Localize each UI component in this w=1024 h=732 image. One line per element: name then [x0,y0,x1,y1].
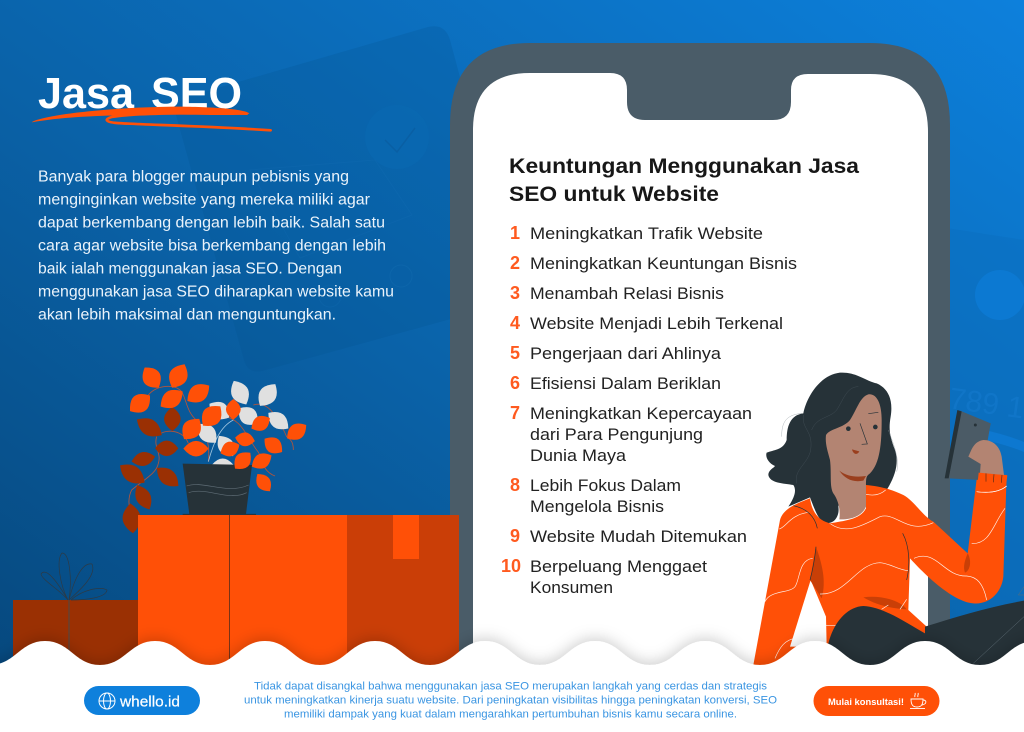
item 6: 6 [510,373,520,393]
item 4: 4 [510,313,520,333]
item 3: Menambah Relasi Bisnis [530,284,724,303]
item 2: Meningkatkan Keuntungan Bisnis [530,254,797,273]
phone heading: Keuntungan Menggunakan Jasa [509,154,860,178]
title: Jasa SEO [32,69,271,130]
item 5: 5 [510,343,520,363]
item 8: 8 [510,475,520,495]
item 7: dari Para Pengunjung [530,425,703,444]
neck and face [826,394,882,519]
intro paragraph: menginginkan website yang mereka miliki agar [38,192,370,208]
intro paragraph: Banyak para blogger maupun pebisnis yang [38,168,349,186]
plant [115,360,311,534]
title: Jasa SEO: Jasa [38,69,135,118]
item 10: 10 [501,556,521,576]
small gift box [13,553,138,670]
plant vines [129,386,293,510]
item 3: 3 [510,283,520,303]
item 8 [510,475,681,516]
shoulder creases [793,506,909,580]
hair [766,373,897,523]
item 10 [501,556,707,597]
call-to-action button: Mulai konsultasi! [828,697,904,708]
cuff edge [977,486,1007,492]
footer text [244,680,777,720]
item 6: Efisiensi Dalam Beriklan [530,374,721,393]
cuff [977,473,1007,492]
item 7: Meningkatkan Kepercayaan [530,404,752,423]
intro paragraph [38,168,394,324]
title: Jasa SEO: SEO [151,69,242,118]
item 7 [510,403,752,465]
footer text: Tidak dapat disangkal bahwa menggunakan jasa SEO merupakan langkah yang cerdas dan strategis [254,680,768,692]
item 7: Dunia Maya [530,446,627,465]
item 8: Lebih Fokus Dalam [530,476,681,495]
whello.id pill [84,686,200,715]
call-to-action button [814,686,940,716]
gap between arm and torso [790,580,827,647]
item 4: Website Menjadi Lebih Terkenal [530,314,783,333]
sweater [753,473,1007,665]
background: faded credit card left [176,26,520,372]
sweater wavy lines [765,486,1007,658]
whello.id pill: whello.id [119,694,180,710]
phone heading: SEO untuk Website [509,182,719,206]
hand [968,440,1004,475]
leg line [973,587,1024,663]
plant white vine [208,420,233,462]
item 2: 2 [510,253,520,273]
icon: globe [99,693,115,709]
item 8: Mengelola Bisnis [530,497,664,516]
intro paragraph: cara agar website bisa berkembang dengan lebih [38,238,386,254]
hair outer lines [782,413,898,472]
footer wave [0,641,1024,732]
item 9: 9 [510,526,520,546]
icon: coffee cup [910,693,926,708]
legs [828,601,1024,665]
background: faded credit card right: 789 1 [947,382,1024,425]
plant pot [183,464,256,514]
item 10: Konsumen [530,578,613,597]
item 1: 1 [510,223,520,243]
sweater shading [810,547,970,609]
item 10: Berpeluang Menggaet [530,557,707,576]
benefit list [501,223,797,597]
orange leaves [124,360,311,495]
held phone [945,410,991,480]
facial features [839,412,878,481]
intro paragraph: baik ialah menggunakan jasa SEO. Dengan [38,260,342,278]
cardboard box [138,515,459,670]
intro paragraph: dapat berkembang dengan lebih baik. Salah satu [38,214,385,232]
intro paragraph: menggunakan jasa SEO diharapkan website kamu [38,284,394,300]
hair strand lines [796,387,858,483]
item 9: Website Mudah Ditemukan [530,527,747,546]
background: faded credit card right [940,227,1024,600]
phone heading [509,154,860,206]
footer text: untuk meningkatkan kinerja suatu website. Dari peningkatan visibilitas hingga peningkatan konversi, SEO [244,694,777,706]
cuff lines [986,473,1002,483]
phone screen with notch [473,73,928,700]
dark leaves [115,407,183,534]
footer text: memiliki dampak yang kuat dalam mengarahkan pertumbuhan bisnis kamu secara online. [284,708,737,720]
item 7: 7 [510,403,520,423]
phone frame [450,43,950,700]
woman with phone [753,373,1024,665]
item 1: Meningkatkan Trafik Website [530,224,763,243]
intro paragraph: akan lebih maksimal dan menguntungkan. [38,306,336,324]
item 5: Pengerjaan dari Ahlinya [530,344,722,363]
white leaves [193,377,293,471]
